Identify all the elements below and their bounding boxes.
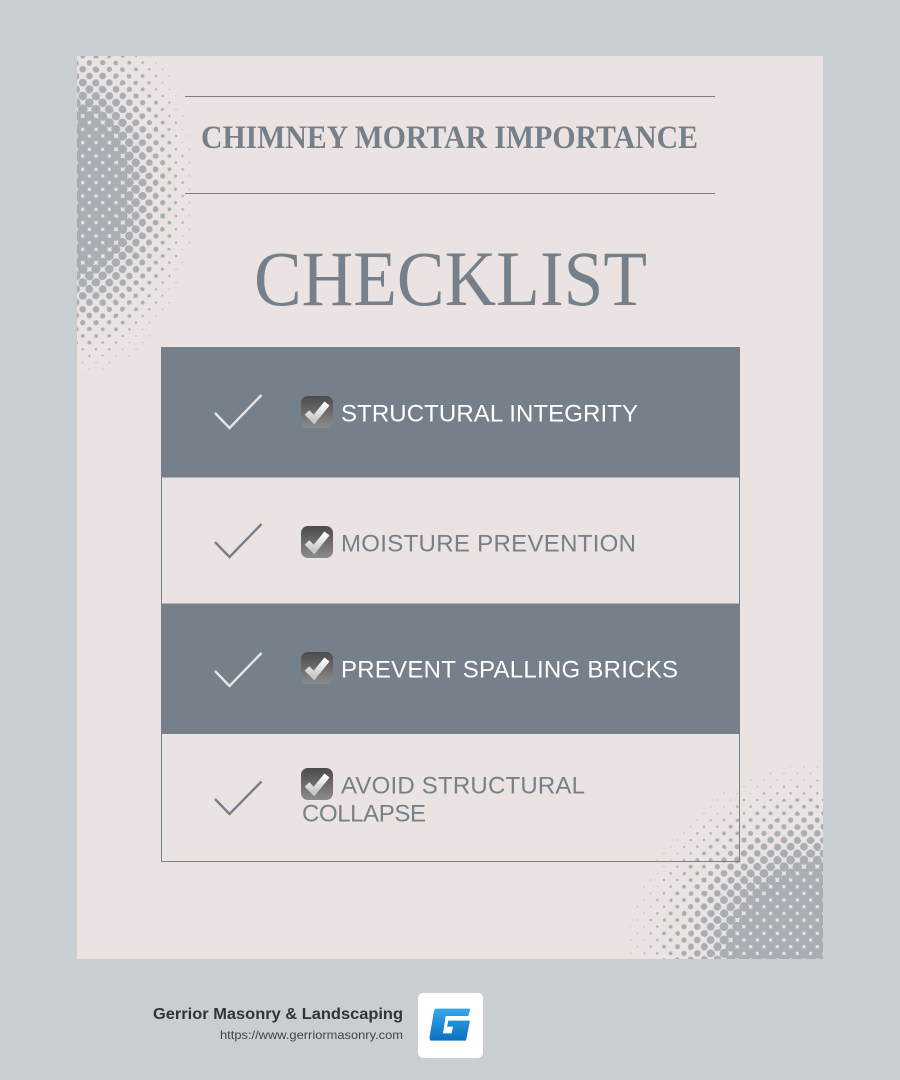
halftone: top-left corner [77,56,195,376]
icon: checkbox [301,526,333,558]
footer: company name: Gerrior Masonry & Landscaping [153,1006,403,1023]
footer: url: https://www.gerriormasonry.com [220,1028,403,1042]
icon: large check [215,524,262,557]
icon: checkbox [301,768,333,800]
label: AVOID STRUCTURAL [341,772,585,800]
label [302,772,585,828]
subtitle: CHIMNEY MORTAR IMPORTANCE [201,120,698,156]
checklist row 4 [162,734,740,862]
icon: checkbox [301,396,333,428]
panel: checklist card [77,56,823,959]
icon: large check [215,653,262,686]
icon: checkbox [301,652,333,684]
checklist row 2 [162,477,740,604]
label: COLLAPSE [302,800,426,828]
checklist row 3 [161,604,740,734]
title: CHECKLIST [254,235,647,322]
halftone: bottom-right corner [628,764,823,959]
icon: large check [215,395,262,428]
logo tile [418,993,483,1058]
label: PREVENT SPALLING BRICKS [341,656,678,684]
label: MOISTURE PREVENTION [341,530,636,558]
checklist row 1 [161,347,740,477]
icon: G logo [430,1009,470,1041]
label: STRUCTURAL INTEGRITY [341,400,638,428]
icon: large check [215,782,262,814]
